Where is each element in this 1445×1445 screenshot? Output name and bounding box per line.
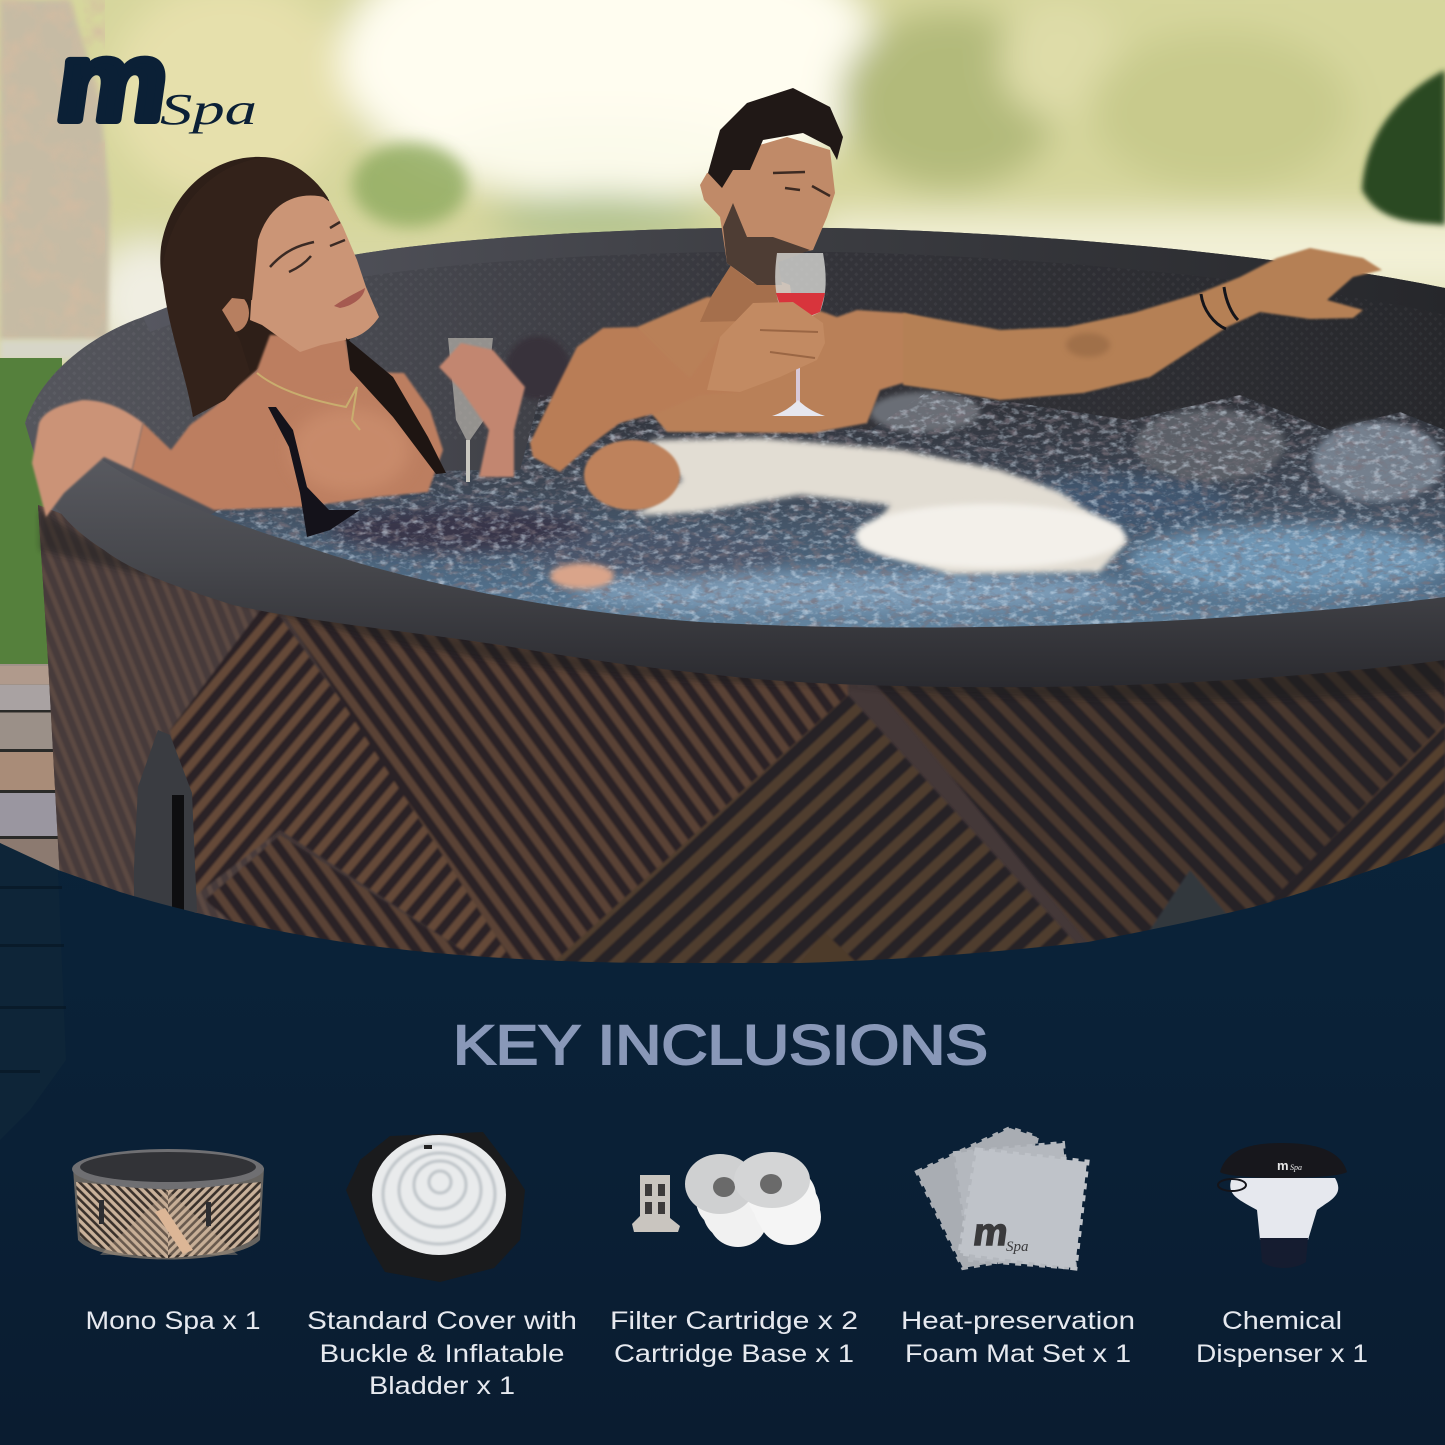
logo: mSpa: m bbox=[50, 18, 177, 144]
water highlights bbox=[330, 475, 1445, 612]
woman necklace bbox=[257, 373, 360, 430]
stone pillar bbox=[0, 0, 110, 340]
woman hair lock bbox=[162, 158, 328, 417]
rim shadow on body bbox=[40, 510, 1445, 701]
woman lips bbox=[334, 288, 365, 308]
man bracelets bbox=[1201, 287, 1238, 329]
tub back rim bbox=[143, 228, 1445, 332]
label: filter cartridge bbox=[610, 1307, 858, 1368]
logo: mSpa: Spa bbox=[160, 85, 257, 134]
man torso bbox=[637, 297, 1000, 433]
man neck bbox=[700, 262, 795, 322]
man knee bbox=[584, 440, 680, 510]
icon: foam mat set: m bbox=[971, 1211, 1011, 1254]
lawn bbox=[0, 358, 62, 668]
deck boards bbox=[0, 664, 62, 874]
woman chest light bbox=[290, 408, 410, 492]
water splashes bbox=[506, 336, 1443, 502]
icon: filter cartridges and base bbox=[632, 1152, 821, 1247]
side handle strap bbox=[134, 730, 197, 912]
panel: key inclusions bbox=[0, 843, 1445, 1445]
woman long hair bbox=[346, 338, 446, 474]
front rim bbox=[37, 445, 1445, 687]
spa tub bbox=[25, 88, 1445, 1010]
tub inner wall bbox=[25, 228, 1445, 640]
label: filter cartridge: Cartridge Base x 1 bbox=[614, 1340, 854, 1368]
woman face lines bbox=[270, 222, 345, 272]
label: foam mat: Heat-preservation bbox=[901, 1307, 1135, 1335]
label: standard cover: Bladder x 1 bbox=[369, 1372, 515, 1400]
label: foam mat: Foam Mat Set x 1 bbox=[905, 1340, 1131, 1368]
label: filter cartridge: Filter Cartridge x 2 bbox=[610, 1307, 858, 1335]
icon: foam mat set: Spa bbox=[1006, 1239, 1028, 1255]
foam bbox=[635, 438, 1128, 574]
icon: standard cover bbox=[346, 1132, 525, 1282]
man hair bbox=[708, 88, 843, 188]
label: chemical dispenser: Chemical bbox=[1222, 1307, 1342, 1335]
deck showing through panel bbox=[0, 843, 66, 1140]
toes bbox=[550, 563, 614, 589]
man wine glass bbox=[772, 253, 826, 416]
logo: mSpa bbox=[50, 18, 257, 144]
water texture bbox=[215, 390, 1445, 628]
man face lines bbox=[773, 172, 830, 196]
man bbox=[530, 88, 1382, 510]
body stripe pattern bbox=[38, 505, 1445, 963]
man beard bbox=[723, 203, 810, 285]
man hand bbox=[707, 302, 825, 392]
woman bbox=[132, 157, 525, 537]
man elbow shade bbox=[1066, 333, 1110, 357]
photo background: garden bbox=[0, 0, 1445, 874]
icon: chemical dispenser: m bbox=[1277, 1158, 1289, 1173]
label: mono spa: Mono Spa x 1 bbox=[86, 1307, 260, 1335]
icon: mono spa bbox=[72, 1149, 264, 1260]
woman hand on rim bbox=[32, 400, 143, 517]
man left arm bbox=[530, 327, 760, 472]
label: standard cover bbox=[307, 1307, 577, 1400]
man right arm bbox=[903, 248, 1382, 400]
woman swimsuit bbox=[268, 407, 360, 537]
icon: foam mat set bbox=[917, 1128, 1087, 1268]
label: standard cover: Buckle & Inflatable bbox=[320, 1340, 564, 1368]
heading: KEY INCLUSIONS bbox=[453, 1013, 988, 1076]
icon: chemical dispenser bbox=[1218, 1143, 1347, 1268]
woman neck and torso bbox=[132, 335, 443, 510]
water surface bbox=[60, 390, 1445, 660]
label: standard cover: Standard Cover with bbox=[307, 1307, 577, 1335]
woman glass bbox=[448, 338, 493, 482]
woman ear bbox=[219, 294, 249, 332]
tub body bbox=[38, 505, 1445, 1000]
label: chemical dispenser: Dispenser x 1 bbox=[1196, 1340, 1368, 1368]
man head bbox=[700, 137, 835, 283]
woman hand and forearm bbox=[439, 343, 525, 477]
label: foam mat bbox=[901, 1307, 1135, 1368]
label: chemical dispenser bbox=[1196, 1307, 1368, 1368]
woman face bbox=[250, 185, 379, 352]
icon: chemical dispenser: Spa bbox=[1290, 1163, 1302, 1172]
woman hair bbox=[160, 157, 350, 417]
